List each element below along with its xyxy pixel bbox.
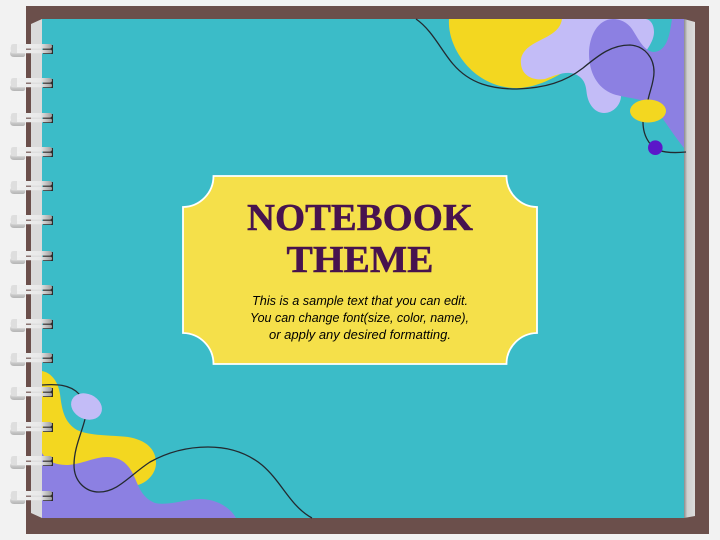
bottom left decoration <box>42 371 312 518</box>
lilac oval <box>67 388 106 425</box>
spiral binding <box>10 44 53 504</box>
body text: or apply any desired formatting. <box>269 327 451 342</box>
lilac blob <box>521 19 654 113</box>
body text: You can change font(size, color, name), <box>250 310 469 325</box>
yellow oval <box>630 100 666 122</box>
left page edge <box>31 19 42 518</box>
indigo dot <box>648 140 663 155</box>
curved line <box>42 385 312 518</box>
body text: This is a sample text that you can edit. <box>252 293 468 308</box>
yellow blob <box>42 371 156 485</box>
heading: NOTEBOOK <box>247 197 473 239</box>
ticket shape <box>183 176 537 364</box>
title panel <box>183 176 537 364</box>
heading: THEME <box>286 239 434 281</box>
right page edge <box>684 19 695 518</box>
yellow blob <box>449 19 580 88</box>
top right decoration <box>416 19 686 155</box>
heading <box>247 197 473 281</box>
curved line <box>416 19 686 153</box>
body text <box>250 293 469 342</box>
purple blob <box>589 19 684 148</box>
purple blob <box>42 453 236 518</box>
